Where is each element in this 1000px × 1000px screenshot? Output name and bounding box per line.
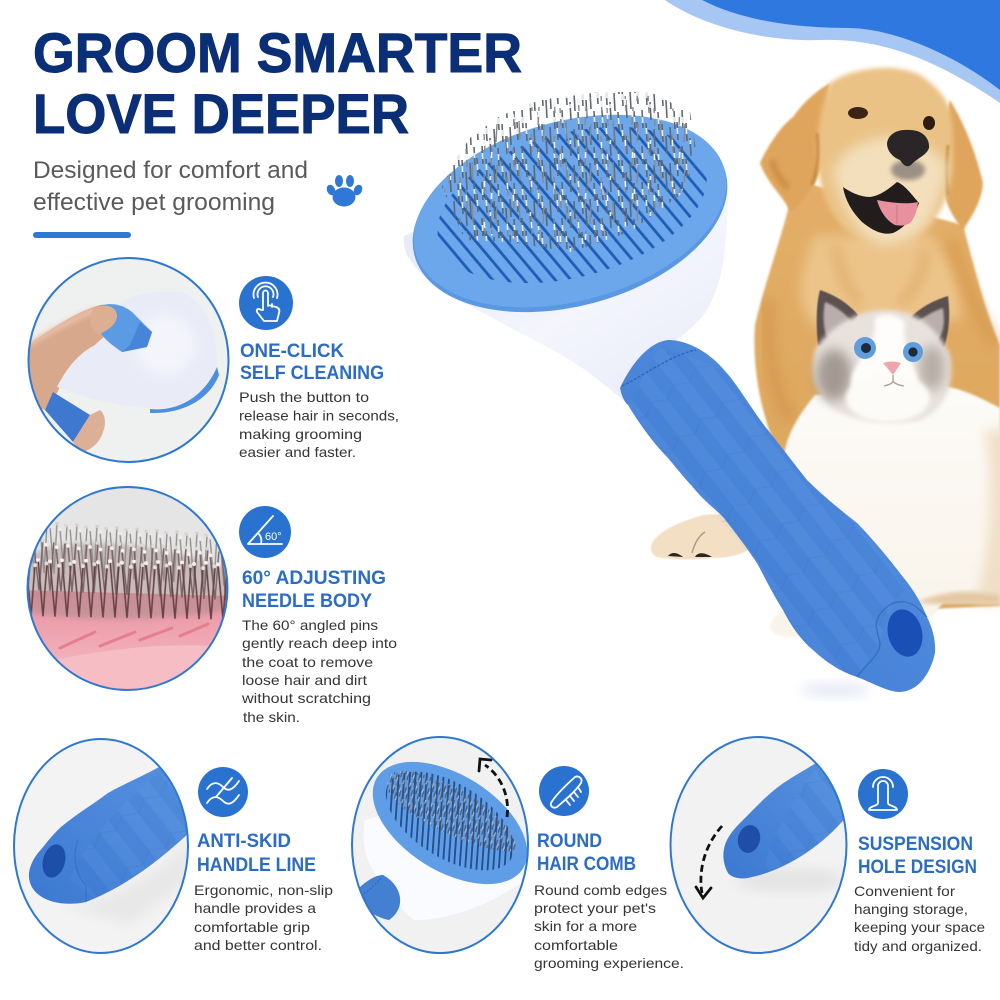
- dog chest highlights: [801, 235, 961, 330]
- cat body: [770, 385, 1000, 637]
- description: [194, 882, 333, 953]
- photo ring: [28, 258, 228, 462]
- accent bar: [33, 232, 131, 238]
- dog muzzle: [833, 137, 947, 245]
- heading: HANDLE LINE: [197, 855, 316, 876]
- photo: dog and cat: [651, 68, 1000, 637]
- cat head: [813, 310, 951, 423]
- dog head: [817, 68, 953, 245]
- description: Convenient for: [854, 883, 955, 899]
- heading: ONE-CLICK: [240, 341, 344, 362]
- photo ring: [14, 739, 188, 953]
- description: Push the button to: [239, 389, 369, 405]
- hanging hole: [883, 606, 927, 660]
- description: release hair in seconds,: [239, 408, 399, 424]
- dog mouth: [843, 182, 919, 234]
- description: Ergonomic, non-slip: [194, 882, 333, 898]
- description: hanging storage,: [854, 901, 968, 917]
- photo: round comb head: [353, 738, 527, 952]
- heading: HAIR COMB: [537, 854, 636, 875]
- dog ear folds: [812, 133, 948, 195]
- grip handle: [620, 340, 935, 692]
- heading: [242, 568, 386, 612]
- description: protect your pet's: [534, 900, 656, 916]
- description: The 60° angled pins: [242, 617, 378, 633]
- heading: 60° ADJUSTING: [242, 568, 386, 589]
- photo: handle hole: [672, 738, 846, 952]
- decorative top-right wave: [665, 0, 1000, 103]
- photo: handle end: [15, 740, 187, 952]
- heading: [240, 341, 384, 384]
- heading: [197, 831, 316, 876]
- icon: 60 degree angle: 60°: [265, 531, 282, 543]
- photo ring: [28, 487, 228, 690]
- cat rear fur: [975, 430, 1000, 603]
- title: LOVE DEEPER: [33, 82, 409, 145]
- dog tongue: [877, 200, 918, 226]
- subtitle: Designed for comfort and: [33, 157, 308, 184]
- photo ring: [352, 737, 528, 953]
- brush pins second layer: [442, 96, 695, 245]
- description: [241, 617, 397, 725]
- subtitle: effective pet grooming: [33, 189, 275, 216]
- cat: [770, 290, 1000, 637]
- direction arrow: [696, 826, 722, 898]
- cat ears: [817, 290, 858, 350]
- heading: ANTI-SKID: [197, 831, 291, 852]
- photo: thumb pressing button: [30, 259, 228, 461]
- brush pins: [442, 92, 696, 252]
- description: tidy and organized.: [854, 938, 982, 954]
- description: easier and faster.: [239, 444, 356, 460]
- panel: one-click self cleaning: [20, 250, 399, 470]
- dog ears: [760, 83, 830, 212]
- dog nose: [887, 130, 929, 166]
- description: handle provides a: [194, 900, 316, 916]
- heading: ROUND: [537, 831, 602, 852]
- description: comfortable: [534, 937, 618, 953]
- grip collar line: [622, 350, 696, 386]
- description: Round comb edges: [534, 882, 667, 898]
- description: without scratching: [241, 690, 371, 706]
- description: keeping your space: [854, 919, 985, 935]
- main product: slicker brush: [391, 83, 935, 692]
- icon: 60 degree angle: [239, 506, 291, 558]
- panel: 60 degree needle body: [20, 480, 397, 725]
- icon: hanger hook: [858, 769, 908, 819]
- dog body: [730, 180, 1000, 610]
- grip texture: [628, 345, 905, 677]
- title: GROOM SMARTER: [33, 21, 522, 84]
- description: loose hair and dirt: [242, 672, 367, 688]
- title: [33, 21, 522, 145]
- direction arrow: [479, 759, 508, 817]
- description: comfortable grip: [194, 919, 310, 935]
- panel: anti-skid handle line: [10, 735, 333, 960]
- dog: [651, 68, 1000, 610]
- description: gently reach deep into: [242, 635, 397, 651]
- panel: round hair comb: [345, 730, 684, 971]
- description: the skin.: [243, 709, 300, 725]
- description: the coat to remove: [242, 654, 373, 670]
- heading: SELF CLEANING: [240, 363, 384, 384]
- description: and better control.: [194, 937, 322, 953]
- heading: SUSPENSION: [858, 834, 973, 855]
- heading: HOLE DESIGN: [858, 857, 977, 878]
- cat nose: [883, 362, 901, 375]
- icon: wavy lines: [198, 767, 248, 817]
- photo ring: [670, 737, 846, 953]
- description: [854, 883, 985, 954]
- brush white body: [404, 190, 728, 402]
- description: [534, 882, 684, 971]
- photo: angled pins close-up: [28, 488, 226, 689]
- cat eyes: [854, 337, 876, 359]
- subtitle: [33, 157, 308, 216]
- grip end seam: [857, 602, 927, 677]
- icon: paw print: [325, 175, 364, 206]
- icon: tap hand: [239, 276, 293, 330]
- dog eyes: [848, 107, 868, 119]
- heading: [858, 834, 977, 878]
- heading: NEEDLE BODY: [242, 591, 372, 612]
- dog paw: [651, 514, 752, 559]
- brush slots: [437, 126, 707, 284]
- panel: suspension hole design: [665, 730, 985, 960]
- icon: comb: [539, 766, 589, 816]
- description: [239, 389, 399, 460]
- description: making grooming: [239, 426, 362, 442]
- heading: [537, 831, 636, 875]
- description: grooming experience.: [534, 955, 684, 971]
- description: skin for a more: [534, 918, 637, 934]
- handle shadow: [800, 683, 870, 697]
- brush head: [391, 83, 749, 345]
